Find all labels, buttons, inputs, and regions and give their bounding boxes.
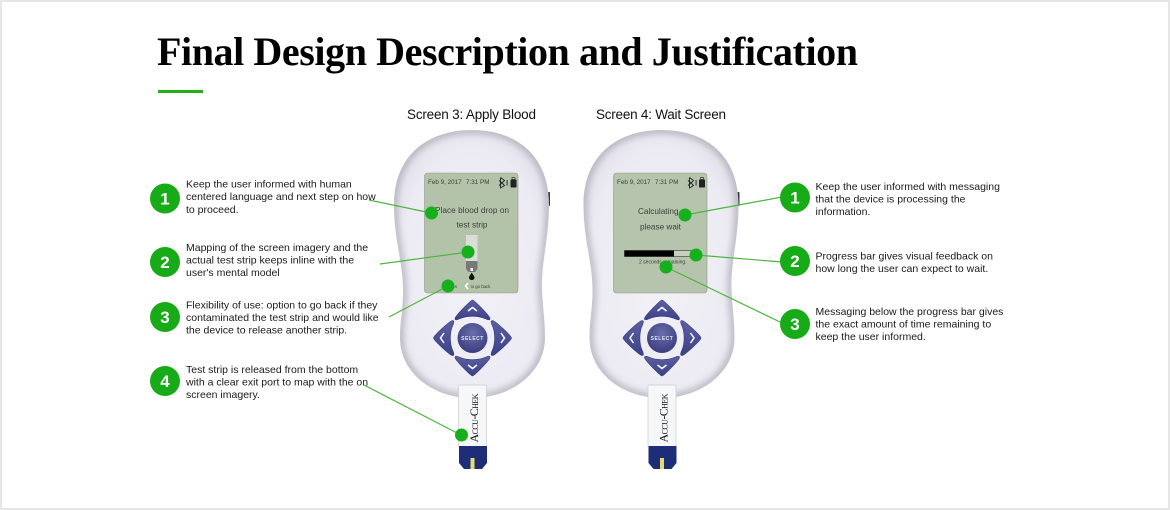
test strip: Accu-Chek [467, 393, 481, 442]
callout 2 right: progress bar feedback: Progress bar gives visual feedback on [816, 250, 993, 262]
lcd screen: Feb 9, 2017 [617, 179, 651, 186]
bluetooth and battery icons [499, 178, 516, 188]
callout 3 right: time remaining message: Messaging below the progress bar gives [816, 306, 1003, 318]
heading: screen 4: Screen 4: Wait Screen [596, 107, 726, 122]
lcd screen [614, 173, 707, 293]
callout 1 right: device processing message [678, 181, 1000, 222]
lcd screen: 7:31 PM [655, 179, 678, 186]
heading: screen 3: Screen 3: Apply Blood [407, 107, 536, 122]
lcd screen: 7:31 PM [466, 179, 489, 186]
title accent rule [158, 90, 203, 93]
lcd screen: Feb 9, 2017 [428, 179, 462, 186]
callout 2 left: mapping of screen imagery: Mapping of the screen imagery and the [186, 242, 368, 254]
test strip: Accu-Chek [656, 393, 670, 442]
lcd screen: test strip [457, 220, 488, 230]
callout 2 right: progress bar feedback: how long the user can expect to wait. [816, 263, 988, 275]
lcd screen: 2 seconds remaining. [639, 260, 687, 266]
lcd screen: to go back [470, 284, 491, 289]
d-pad: SELECT [651, 336, 673, 342]
callout 3 right: time remaining message: keep the user informed. [816, 331, 926, 343]
callout 2 left: mapping of screen imagery [150, 242, 474, 279]
progress bar [624, 250, 694, 256]
callout 3 left: flexibility of use: 3 [160, 308, 170, 327]
callout 2 right: progress bar feedback [690, 246, 993, 276]
callout 4 left: test strip exit port: 4 [160, 372, 170, 391]
callout 1 left: human centered language: 1 [160, 190, 170, 208]
test strip [458, 385, 487, 469]
callout 4 left: test strip exit port: screen imagery. [186, 389, 260, 401]
callout 2 left: mapping of screen imagery: 2 [160, 253, 170, 272]
callout 3 left: flexibility of use [150, 280, 454, 336]
title: Final Design Description and Justification [157, 29, 858, 74]
callout 4 left: test strip exit port: Test strip is released from the bottom [186, 364, 358, 376]
callout 3 left: flexibility of use: Flexibility of use: option to go back if they [186, 300, 378, 312]
d-pad [623, 300, 701, 376]
callout 1 right: device processing message: information. [816, 206, 870, 218]
lcd screen: Calculating [638, 207, 679, 216]
lcd screen: Place blood drop on [435, 206, 509, 215]
callout 3 right: time remaining message: 3 [790, 315, 800, 334]
callout 2 right: progress bar feedback: 2 [790, 252, 800, 271]
lcd screen [424, 173, 518, 293]
callout 1 left: human centered language: to proceed. [186, 204, 239, 216]
callout 1 right: device processing message: Keep the user informed with messaging [816, 181, 1000, 193]
callout 1 right: device processing message: 1 [790, 188, 800, 208]
callout 4 left: test strip exit port: with a clear exit port to map with the on [185, 376, 368, 388]
callout 4 left: test strip exit port [150, 364, 468, 442]
callout 1 right: device processing message: that the device is processing the [816, 194, 966, 206]
test strip [648, 385, 676, 469]
device: screen 3 meter [394, 130, 550, 469]
lcd screen: Press [446, 284, 457, 289]
callout 1 left: human centered language: Keep the user informed with human [186, 178, 352, 190]
meter body [394, 130, 550, 398]
callout 1 left: human centered language [150, 178, 438, 220]
bluetooth and battery icons [688, 178, 705, 188]
d-pad: SELECT [461, 336, 484, 342]
device: screen 4 meter [584, 130, 740, 469]
lcd screen: please wait [640, 222, 682, 232]
callout 2 left: mapping of screen imagery: actual test strip keeps inline with the [186, 254, 354, 266]
d-pad [434, 300, 512, 376]
callout 3 right: time remaining message [660, 260, 1003, 343]
callout 3 left: flexibility of use: contaminated the test strip and would like [186, 312, 379, 324]
callout 3 left: flexibility of use: the device to release another strip. [186, 324, 347, 336]
meter body [584, 130, 740, 398]
callout 3 right: time remaining message: the exact amount of time remaining to [816, 318, 991, 330]
callout 1 left: human centered language: centered language and next step on how [186, 191, 376, 203]
screen strip icon [466, 235, 478, 280]
callout 2 left: mapping of screen imagery: user's mental model [186, 267, 280, 279]
